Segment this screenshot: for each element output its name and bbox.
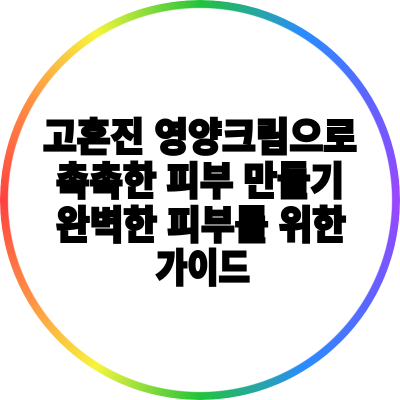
title line 2: 촉촉한 피부 만들기 [56,161,344,204]
title line 1: 고혼진 영양크림으로 [43,117,357,160]
title line 4: 가이드 [156,248,250,291]
title line 3: 완벽한 피부를 위한 [56,205,346,248]
